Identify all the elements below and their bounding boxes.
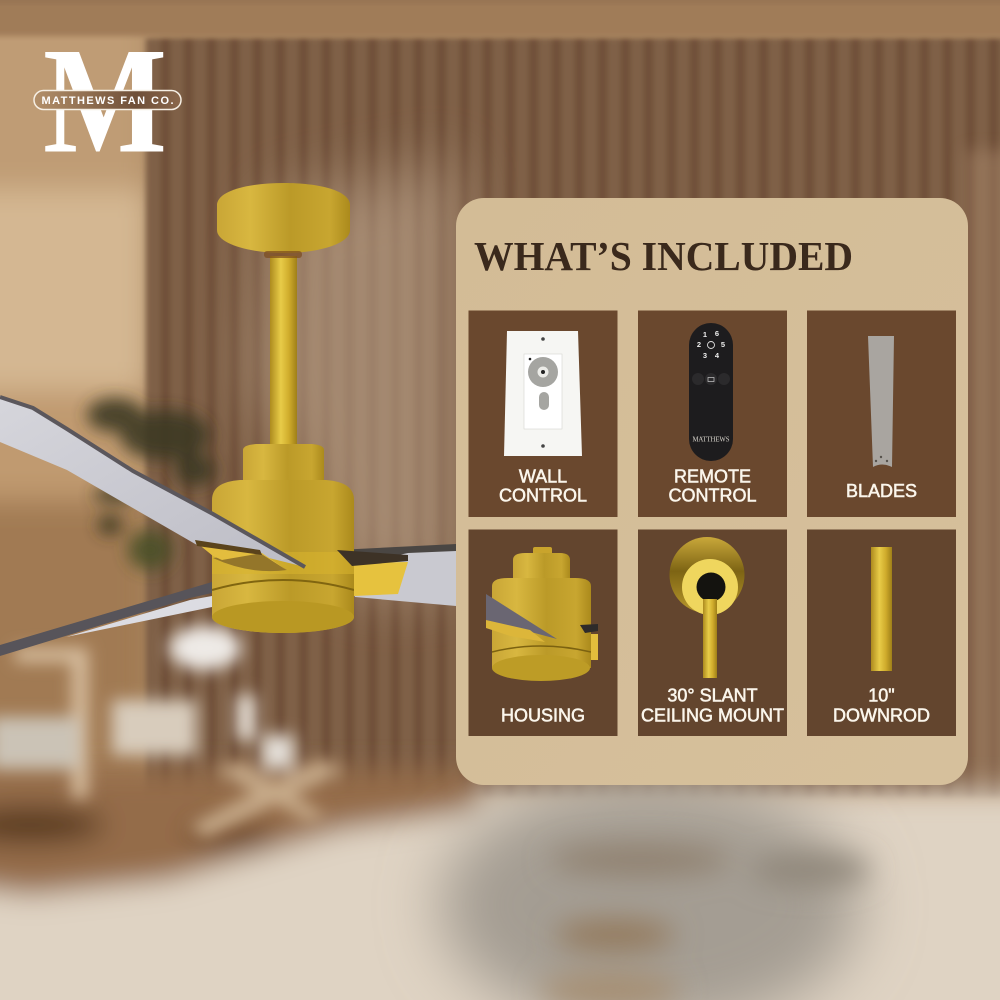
card: housing: HOUSING <box>501 706 585 726</box>
front blade <box>0 396 305 567</box>
icon: remote: MATTHEWS <box>692 436 730 444</box>
back blade right <box>340 545 456 606</box>
logo: Matthews Fan Co.: MATTHEWS FAN CO. <box>42 95 174 107</box>
card: remote control <box>638 310 787 517</box>
card: downrod: 10" <box>868 686 895 706</box>
card: housing <box>468 530 618 736</box>
icon: remote: 5 <box>721 340 725 349</box>
icon: downrod <box>871 547 892 671</box>
icon: remote: 3 <box>703 351 707 360</box>
icon: housing <box>486 547 598 681</box>
ceiling band <box>0 0 1000 36</box>
canopy <box>217 183 350 253</box>
icon: remote: 2 <box>697 340 701 349</box>
icon: remote: 1 <box>703 330 707 339</box>
panel: what's included <box>456 198 968 785</box>
downrod <box>270 256 297 445</box>
ceiling fan <box>0 183 456 656</box>
card: blades <box>807 310 956 517</box>
icon: wall control <box>504 331 582 456</box>
logo: Matthews Fan Co.: M <box>43 16 167 184</box>
card: wall control: CONTROL <box>499 486 587 506</box>
icon: blade <box>868 336 894 467</box>
motor neck <box>243 444 324 480</box>
right bracket <box>354 562 408 596</box>
plant <box>87 398 215 570</box>
card: ceiling mount: 30° SLANT <box>667 686 758 706</box>
icon: remote <box>689 323 733 461</box>
motor housing <box>212 480 354 633</box>
card: wall control: WALL <box>519 466 567 486</box>
heading: WHAT’S INCLUDED <box>474 233 853 279</box>
card: wall control <box>468 310 618 517</box>
icon: slant mount <box>670 537 744 678</box>
wall left <box>0 0 150 780</box>
card: blades: BLADES <box>846 481 917 501</box>
card: downrod: DOWNROD <box>833 706 930 726</box>
icon: remote: 4 <box>715 351 720 360</box>
icon: remote: 6 <box>715 329 719 338</box>
floor <box>0 770 1000 1000</box>
card: downrod <box>807 530 956 736</box>
card: remote control: REMOTE <box>674 466 751 486</box>
housing bottom <box>212 601 354 633</box>
card: remote control: CONTROL <box>668 486 757 506</box>
chairs <box>0 626 345 838</box>
wood slats <box>146 38 1000 798</box>
bottom blade <box>0 582 212 656</box>
card: ceiling mount <box>638 530 787 736</box>
card: ceiling mount: CEILING MOUNT <box>641 706 784 726</box>
